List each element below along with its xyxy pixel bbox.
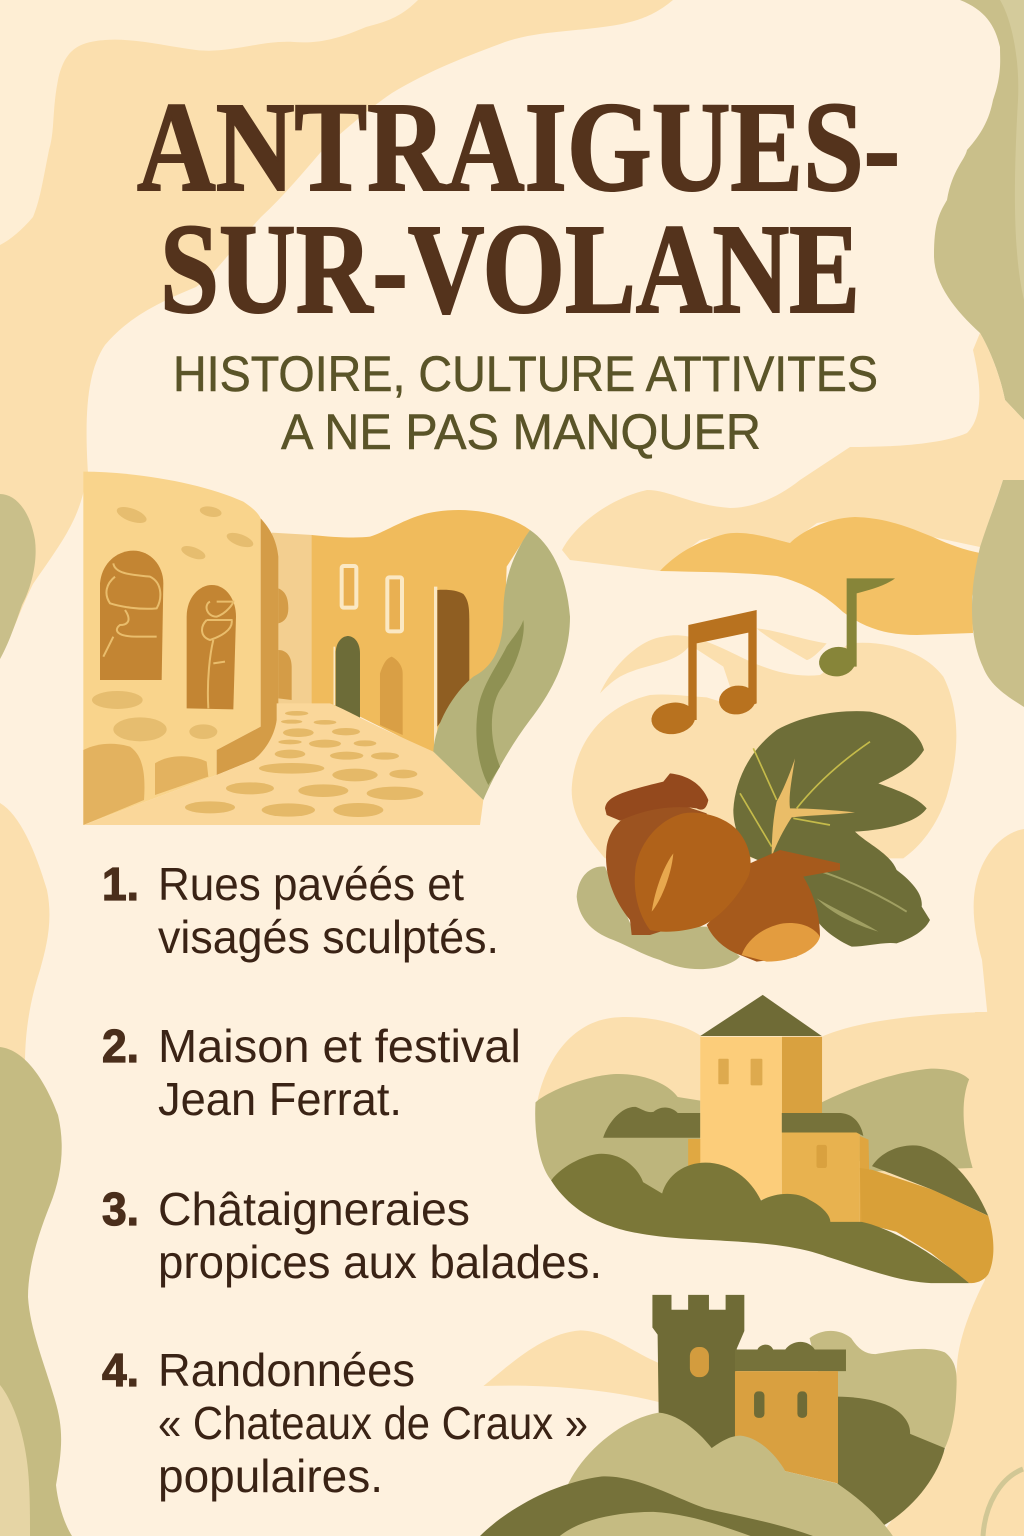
- list item 3: Châtaigneraies: [158, 1183, 470, 1235]
- list item 4: [102, 1344, 588, 1502]
- title: [137, 76, 900, 340]
- title: SUR-VOLANE: [160, 198, 860, 340]
- list item 4: 4.: [102, 1344, 139, 1396]
- illustration: village street: [83, 472, 570, 825]
- list item 3: propices aux balades.: [158, 1236, 602, 1288]
- list item 3: [102, 1183, 602, 1288]
- list item 1: Rues pavéés et: [158, 858, 464, 910]
- list item 4: « Chateaux de Craux »: [158, 1397, 588, 1449]
- illustration: castle ruins: [480, 1295, 957, 1536]
- list item 2: Jean Ferrat.: [158, 1073, 402, 1125]
- subtitle: [173, 346, 878, 460]
- illustration: tower in hills: [535, 995, 993, 1283]
- list item 1: [102, 858, 499, 963]
- icon: chestnuts and leaf: [577, 711, 930, 969]
- window with carved faces: [100, 551, 236, 709]
- list item 2: [102, 1020, 521, 1125]
- list item 1: 1.: [102, 858, 139, 910]
- subtitle: A NE PAS MANQUER: [281, 404, 761, 460]
- icon: music notes: [649, 578, 895, 737]
- list item 3: 3.: [102, 1183, 139, 1235]
- subtitle: HISTOIRE, CULTURE ATTIVITES: [173, 346, 878, 402]
- list item 4: populaires.: [158, 1450, 383, 1502]
- list item 2: Maison et festival: [158, 1020, 521, 1072]
- title: ANTRAIGUES-: [137, 76, 900, 218]
- background swirl behind notes: [572, 628, 956, 858]
- list item 4: Randonnées: [158, 1344, 415, 1396]
- list item 2: 2.: [102, 1020, 139, 1072]
- list item 1: visagés sculptés.: [158, 911, 499, 963]
